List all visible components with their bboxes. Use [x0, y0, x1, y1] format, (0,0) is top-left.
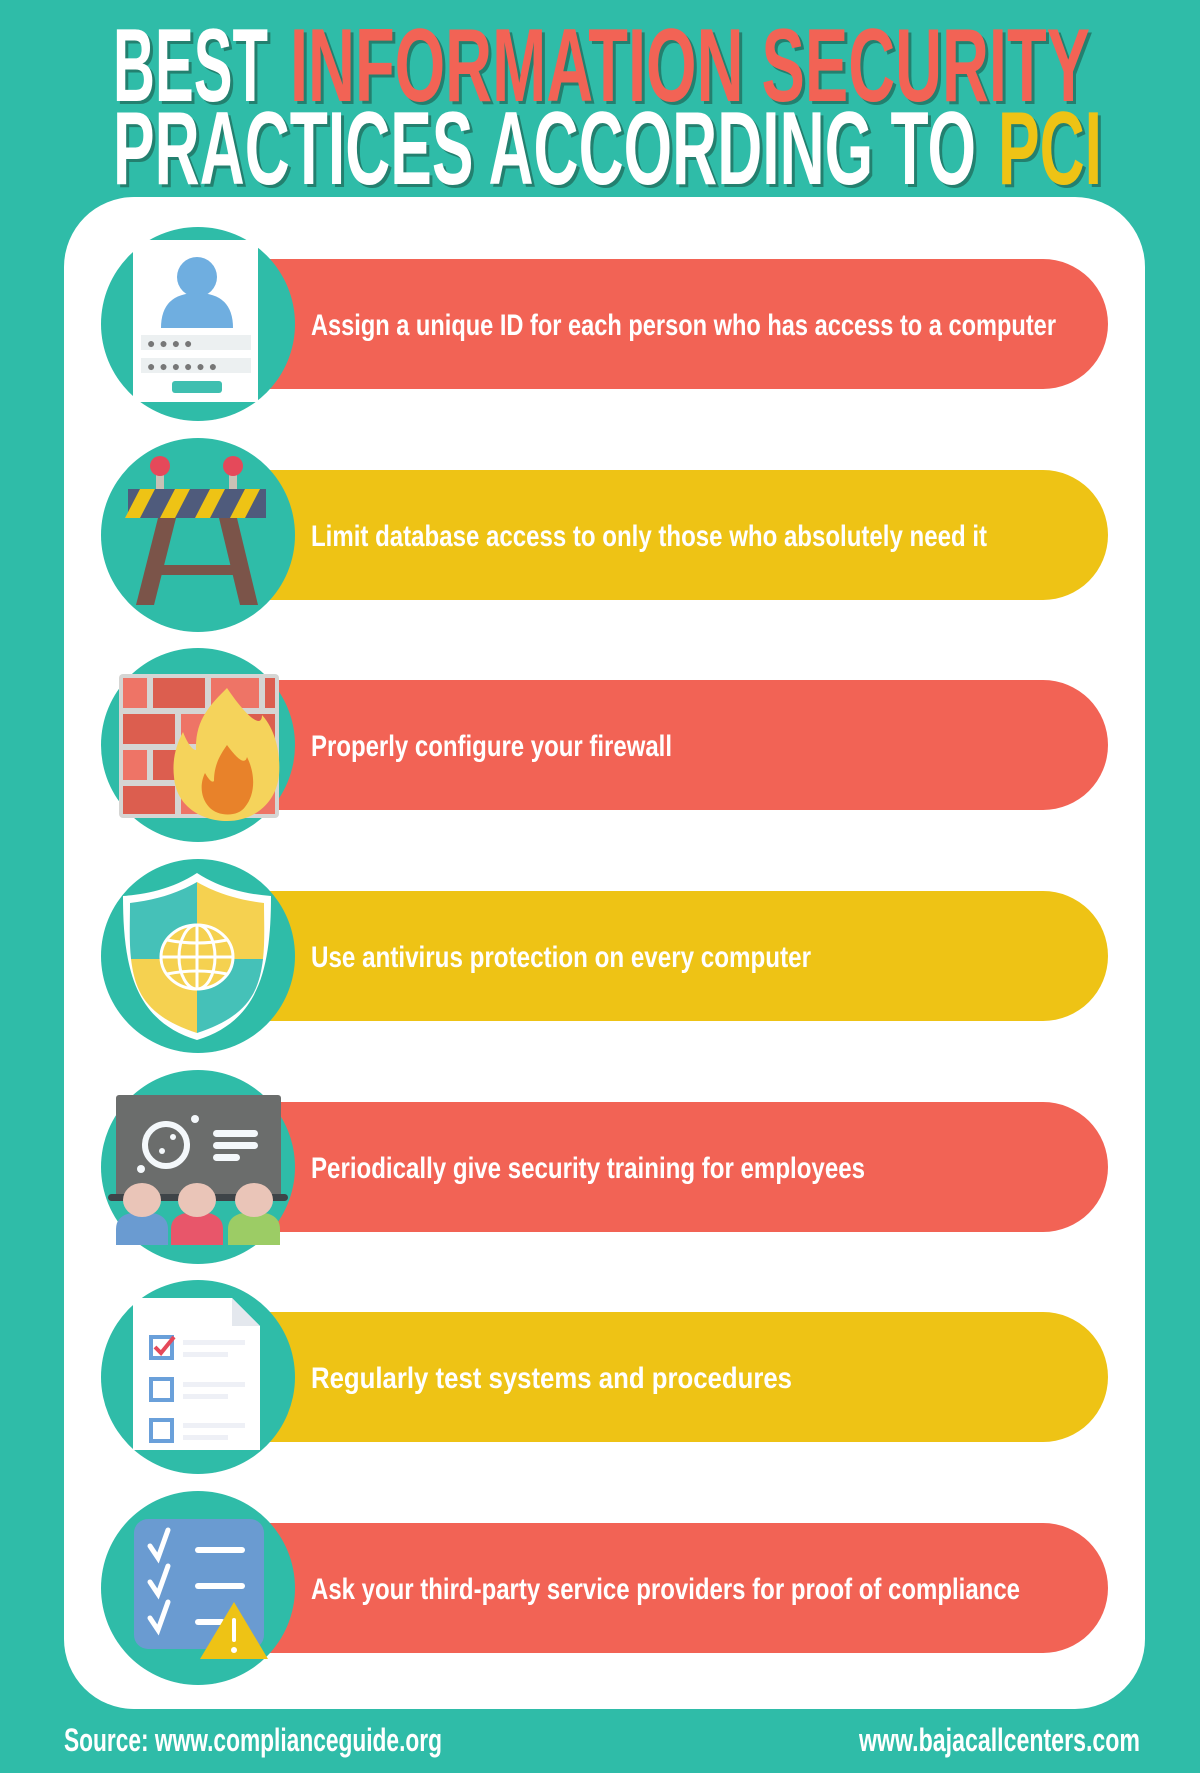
row 1: unique ID [101, 227, 1108, 421]
row 2: database access [101, 438, 1108, 632]
text: row 3: Properly configure your firewall [311, 730, 672, 763]
title: PCI [998, 91, 1102, 207]
text: row 5: Periodically give security training for employees [311, 1152, 865, 1185]
icon: ID card [133, 240, 258, 402]
row 4: antivirus [101, 859, 1108, 1053]
text: row 2: Limit database access to only those who absolutely need it [311, 520, 987, 553]
title: BEST [116, 11, 271, 127]
title: PCI [1001, 94, 1105, 210]
text: row 4: Use antivirus protection on every computer [311, 941, 811, 974]
row 6: testing [101, 1280, 1108, 1474]
text: row 6: Regularly test systems and procedures [311, 1362, 792, 1395]
panel: white card [64, 197, 1145, 1709]
row 3: firewall [101, 648, 1108, 842]
icon: presentation board [108, 1095, 288, 1245]
text: row 7: Ask your third-party service providers for proof of compliance [311, 1573, 1020, 1606]
title [113, 8, 1105, 210]
icon: firewall [119, 674, 279, 821]
icon: shield [123, 873, 271, 1040]
title: BEST [113, 8, 268, 124]
icon: checklist document [133, 1298, 260, 1450]
icon: barrier [125, 456, 266, 605]
icon: ID card: ● ● ● ● [147, 335, 192, 351]
row 7: third-party compliance [101, 1491, 1108, 1685]
icon: ID card: ● ● ● ● ● ● [147, 358, 217, 374]
footer: source: Source: www.complianceguide.org [64, 1722, 442, 1758]
row 5: training [101, 1070, 1108, 1264]
icon: clipboard with warning [134, 1519, 268, 1659]
